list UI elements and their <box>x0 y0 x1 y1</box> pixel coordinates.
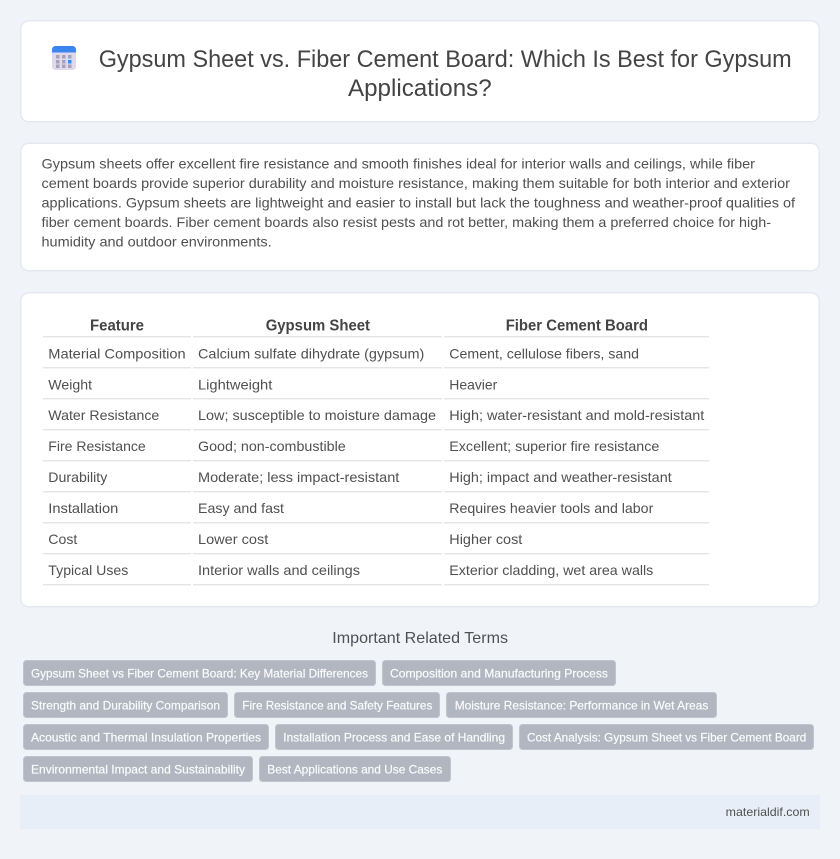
table row: cost: Lower cost <box>198 531 268 547</box>
chip <box>24 724 268 750</box>
chip <box>24 660 376 686</box>
table row: typical uses: Typical Uses <box>48 562 128 578</box>
table row: water resistance: Low; susceptible to moisture damage <box>198 407 436 423</box>
chip: Environmental Impact and Sustainability <box>31 762 245 776</box>
chip <box>234 692 440 718</box>
table row: water resistance: High; water-resistant and mold-resistant <box>449 407 704 423</box>
chip <box>24 692 228 718</box>
panel: header <box>21 21 819 122</box>
table row: weight <box>43 376 709 399</box>
table row: water resistance <box>43 407 709 430</box>
table header row: Feature <box>90 318 144 335</box>
table row: cost: Cost <box>48 531 77 547</box>
chip: Moisture Resistance: Performance in Wet Areas <box>455 698 708 712</box>
table row: water resistance: Water Resistance <box>48 407 160 423</box>
table row: installation: Easy and fast <box>198 500 284 516</box>
table row: installation <box>43 500 709 523</box>
chip <box>446 692 716 718</box>
chip <box>520 724 814 750</box>
table row: weight: Heavier <box>449 376 498 392</box>
table row: fire resistance <box>43 438 709 461</box>
text block: summary: Gypsum sheets offer excellent fire resistance and smooth finishes ideal for interior walls and ceilings, while fiber <box>42 155 755 171</box>
chip <box>382 660 616 686</box>
title <box>99 46 792 102</box>
chip: Cost Analysis: Gypsum Sheet vs Fiber Cement Board <box>527 730 806 744</box>
chip: Gypsum Sheet vs Fiber Cement Board: Key Material Differences <box>31 666 368 680</box>
table header row: Fiber Cement Board <box>506 318 648 335</box>
chip <box>24 756 252 782</box>
heading: important related terms: Important Related Terms <box>332 630 508 647</box>
table row: material composition: Material Composition <box>48 345 186 361</box>
text block: summary: fiber cement boards. Fiber cement boards also resist pests and rot better, making them a preferred choice for high- <box>42 214 771 230</box>
table row: cost <box>43 531 709 554</box>
icon: calendar grid <box>52 46 76 70</box>
table row: weight: Lightweight <box>198 376 272 392</box>
text block: summary <box>42 155 795 249</box>
table row: durability: Durability <box>48 469 107 485</box>
title: Applications? <box>348 75 492 102</box>
table row: weight: Weight <box>48 376 92 392</box>
chip: Best Applications and Use Cases <box>267 762 442 776</box>
table row: typical uses <box>43 562 709 585</box>
table row: durability: High; impact and weather-resistant <box>449 469 672 485</box>
related terms chips <box>24 660 814 782</box>
chip: Installation Process and Ease of Handling <box>283 730 505 744</box>
footer source text: materialdif.com <box>726 805 810 819</box>
text block: summary: applications. Gypsum sheets are lightweight and easier to install but lack the toughness and weather-proof qualities of <box>42 194 795 210</box>
panel: comparison table <box>21 293 819 607</box>
table row: material composition <box>43 345 709 368</box>
chip: Fire Resistance and Safety Features <box>242 698 432 712</box>
table header row <box>43 318 709 337</box>
table row: material composition: Cement, cellulose fibers, sand <box>449 345 639 361</box>
text block: summary: cement boards provide superior durability and moisture resistance, making them suitable for both interior and exterior <box>42 175 790 191</box>
table header row: Gypsum Sheet <box>266 318 371 335</box>
table row: installation: Installation <box>48 500 118 516</box>
footer bar <box>20 795 820 829</box>
title: Gypsum Sheet vs. Fiber Cement Board: Which Is Best for Gypsum <box>99 46 792 73</box>
chip: Acoustic and Thermal Insulation Properties <box>31 730 261 744</box>
chip <box>260 756 450 782</box>
table row: fire resistance: Good; non-combustible <box>198 438 346 454</box>
table row: fire resistance: Fire Resistance <box>48 438 146 454</box>
chip <box>276 724 512 750</box>
panel: summary paragraph <box>21 143 819 271</box>
table row: cost: Higher cost <box>449 531 522 547</box>
table row: durability <box>43 469 709 492</box>
table row: fire resistance: Excellent; superior fire resistance <box>449 438 660 454</box>
chip: Strength and Durability Comparison <box>31 698 220 712</box>
table row: typical uses: Interior walls and ceilings <box>198 562 360 578</box>
table row: durability: Moderate; less impact-resistant <box>198 469 399 485</box>
table row: installation: Requires heavier tools and labor <box>449 500 654 516</box>
table row: typical uses: Exterior cladding, wet area walls <box>449 562 653 578</box>
text block: summary: humidity and outdoor environments. <box>42 233 272 249</box>
table row: material composition: Calcium sulfate dihydrate (gypsum) <box>198 345 424 361</box>
chip: Composition and Manufacturing Process <box>390 666 608 680</box>
